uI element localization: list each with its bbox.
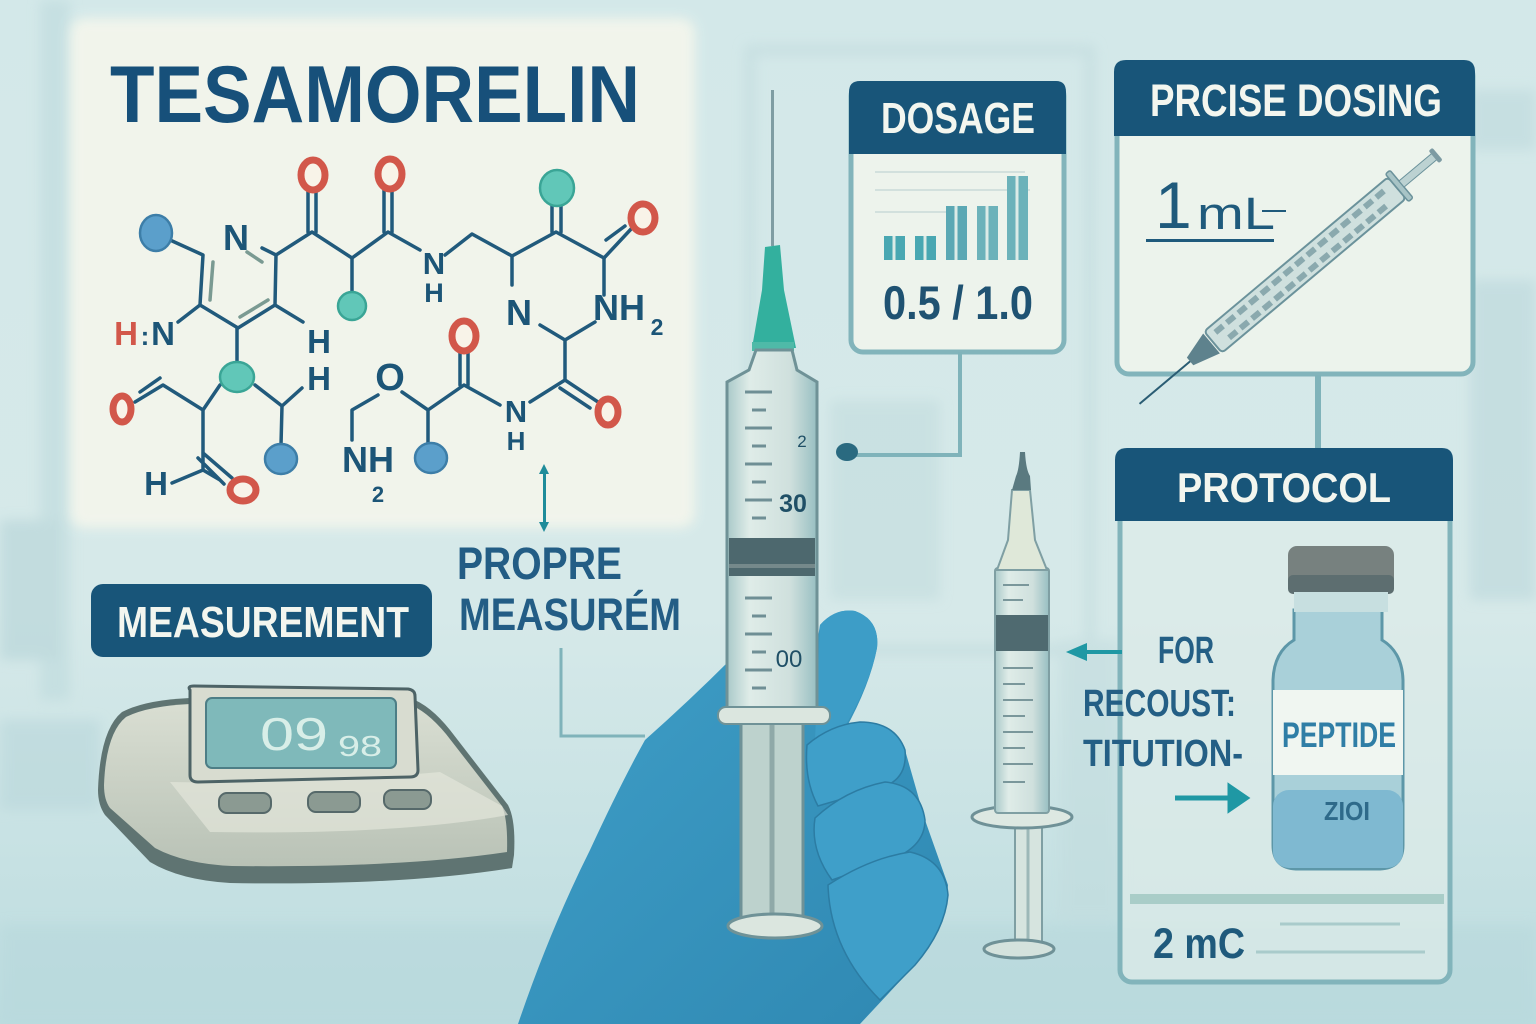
panel: precise dosing	[1114, 60, 1475, 418]
bar chart	[875, 172, 1030, 260]
icon: glove fingers	[806, 722, 948, 1000]
text: for reconstitution: TITUTION-	[1083, 733, 1243, 775]
molecule labels: NH	[593, 287, 645, 328]
text: for reconstitution: FOR	[1158, 630, 1214, 672]
molecule labels: NH	[342, 439, 394, 480]
arrow: to vial	[1175, 787, 1246, 809]
molecule labels: N	[151, 315, 175, 352]
volume label: mL	[1197, 188, 1275, 239]
icon: small syringe	[972, 452, 1072, 958]
icon: digital scale: 09	[260, 708, 328, 760]
divider bar	[1130, 894, 1444, 904]
molecule labels: H	[307, 323, 331, 360]
molecule labels: 2	[651, 314, 663, 340]
molecule labels: :	[141, 321, 149, 351]
molecule labels: H	[144, 465, 168, 502]
icon: digital scale	[98, 686, 514, 883]
text: proper measurement: MEASURÉM	[459, 589, 681, 640]
volume label	[1146, 168, 1286, 242]
molecule labels: O	[375, 357, 405, 399]
panel: protocol	[1115, 448, 1453, 982]
text: for reconstitution	[1083, 630, 1243, 775]
icon: main syringe: 2	[797, 432, 807, 451]
volume label: 1	[1155, 168, 1192, 242]
text: proper measurement	[457, 538, 681, 640]
icon: peptide vial: PEPTIDE	[1282, 716, 1396, 755]
molecule labels: N	[423, 246, 445, 281]
chemical structure diagram	[113, 159, 663, 507]
heading: protocol: PROTOCOL	[1177, 464, 1391, 511]
connector: precise dosing to protocol	[1315, 375, 1321, 448]
title: TESAMORELIN	[110, 50, 640, 140]
icon: main syringe: 30	[779, 490, 807, 518]
text: for reconstitution: RECOUST:	[1083, 683, 1236, 725]
molecule labels: N	[223, 217, 249, 258]
molecule atoms	[113, 159, 655, 501]
icon: digital scale: 98	[338, 731, 382, 763]
molecule labels: H	[424, 278, 444, 308]
molecule labels: 2	[372, 482, 384, 507]
heading: measurement	[91, 584, 432, 657]
icon: gloved hand	[518, 611, 948, 1024]
connector: dosage to syringe	[836, 352, 960, 461]
icon: main syringe: 00	[776, 646, 802, 673]
icon: diagonal syringe	[1128, 140, 1449, 418]
molecule bonds	[135, 190, 632, 484]
molecule labels: H	[114, 315, 138, 352]
molecule labels: N	[505, 394, 527, 429]
arrow: measurement up-down	[539, 464, 549, 532]
icon: peptide vial: ZIOI	[1324, 796, 1370, 826]
panel: dosage	[849, 81, 1066, 352]
text: proper measurement: PROPRE	[457, 538, 622, 589]
panel: molecule backdrop	[70, 18, 695, 528]
molecule labels: H	[507, 426, 525, 456]
icon: peptide vial	[1273, 546, 1403, 869]
dosage values: 0.5 / 1.0	[883, 276, 1033, 329]
molecule labels	[114, 217, 663, 507]
arrow: to small syringe	[1071, 646, 1122, 658]
volume label: 2 mC	[1153, 920, 1245, 968]
molecule labels: H	[307, 360, 331, 397]
connector: measurement to syringe	[561, 648, 645, 736]
icon: main syringe	[718, 90, 830, 938]
heading: precise dosing: PRCISE DOSING	[1150, 75, 1442, 126]
heading: measurement: MEASUREMENT	[117, 598, 409, 647]
molecule labels: N	[506, 292, 532, 333]
heading: dosage: DOSAGE	[881, 94, 1035, 143]
